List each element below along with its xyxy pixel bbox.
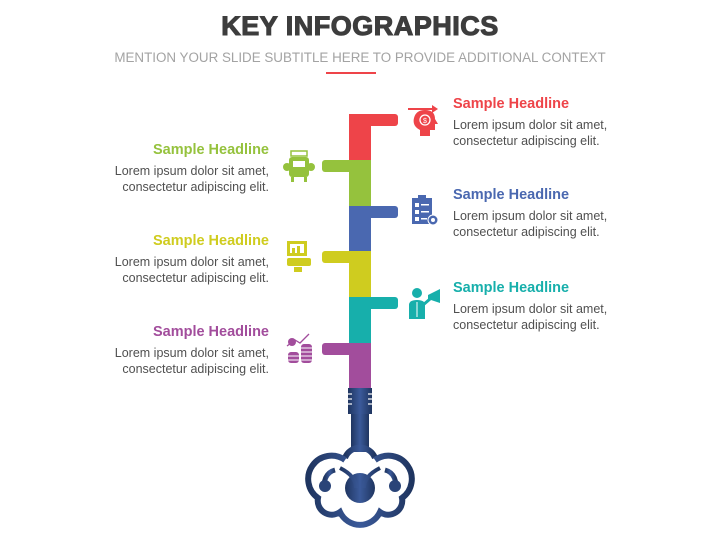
icon: checklist: [412, 195, 438, 224]
panel: red headline: [453, 96, 607, 148]
panel: green headline: consectetur adipiscing elit.: [122, 180, 269, 194]
subtitle: MENTION YOUR SLIDE SUBTITLE HERE TO PROVIDE ADDITIONAL CONTEXT: [114, 50, 606, 65]
panel: red headline: Sample Headline: [453, 96, 569, 112]
panel: blue headline: consectetur adipiscing elit.: [453, 225, 600, 239]
panel: teal headline: [453, 280, 607, 332]
panel: purple headline: consectetur adipiscing elit.: [122, 362, 269, 376]
panel: teal headline: Sample Headline: [453, 280, 569, 296]
icon: person with megaphone: [409, 288, 440, 319]
panel: blue headline: Lorem ipsum dolor sit amet,: [453, 209, 607, 223]
panel: teal headline: Lorem ipsum dolor sit amet,: [453, 302, 607, 316]
panel: yellow headline: Lorem ipsum dolor sit amet,: [115, 255, 269, 269]
panel: purple headline: Lorem ipsum dolor sit amet,: [115, 346, 269, 360]
icon: head with dollar: [408, 105, 438, 136]
panel: yellow headline: [115, 233, 269, 285]
panel: yellow headline: consectetur adipiscing elit.: [122, 271, 269, 285]
panel: green headline: Sample Headline: [153, 142, 269, 158]
panel: yellow headline: Sample Headline: [153, 233, 269, 249]
key handle: [308, 388, 412, 525]
panel: purple headline: Sample Headline: [153, 324, 269, 340]
key shaft segments: [322, 114, 398, 388]
panel: blue headline: [453, 187, 607, 239]
title underline: [326, 72, 376, 74]
panel: red headline: Lorem ipsum dolor sit amet,: [453, 118, 607, 132]
icon: yellow monitor: [287, 241, 311, 272]
panel: purple headline: [115, 324, 269, 376]
icon: head with dollar: $: [423, 118, 427, 125]
icon: coins growth: [286, 334, 312, 363]
panel: green headline: [115, 142, 269, 194]
icon: green bus/stall: [283, 150, 315, 182]
panel: blue headline: Sample Headline: [453, 187, 569, 203]
title: KEY INFOGRAPHICS: [221, 11, 499, 41]
panel: red headline: consectetur adipiscing elit.: [453, 134, 600, 148]
panel: teal headline: consectetur adipiscing elit.: [453, 318, 600, 332]
panel: green headline: Lorem ipsum dolor sit amet,: [115, 164, 269, 178]
